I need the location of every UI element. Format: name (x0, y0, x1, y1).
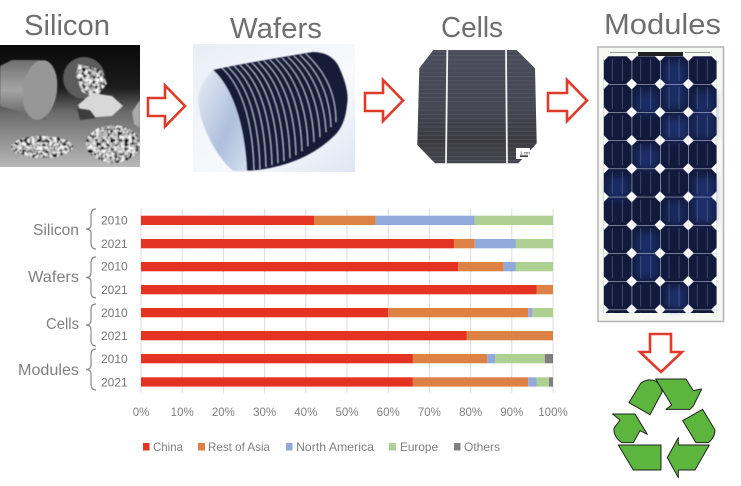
x axis labels: 60% (377, 407, 400, 419)
arrow: silicon to wafers (148, 86, 185, 126)
icon: recycling symbol (613, 379, 715, 478)
x axis labels: 10% (171, 407, 194, 419)
bars: Silicon 2021 (141, 239, 553, 248)
x axis labels: 0% (133, 407, 149, 419)
bar chart: production share by region (18, 209, 568, 419)
legend: Rest of Asia (208, 440, 270, 454)
photo: solar module (598, 47, 724, 322)
bars: Silicon 2010 (141, 216, 553, 225)
bars: Modules 2010 (141, 354, 553, 363)
title: Cells: Cells (441, 12, 503, 44)
year labels: 2010 (101, 306, 128, 320)
bars: Cells 2021 (141, 331, 553, 340)
arrow: cells to modules (548, 80, 587, 121)
photo: solar cell (417, 50, 537, 163)
x axis labels: 30% (253, 407, 276, 419)
x axis labels: 20% (212, 407, 235, 419)
brace: Wafers (86, 257, 96, 298)
bars: Modules 2021 (141, 377, 553, 387)
photo: stack of wafers (193, 44, 355, 172)
year labels: 2010 (101, 260, 128, 274)
arrow: wafers to cells (365, 80, 403, 121)
category label: Cells: Cells (46, 316, 79, 333)
brace: Silicon (86, 209, 96, 249)
category label: Modules: Modules (18, 362, 79, 379)
bars: Wafers 2021 (141, 285, 553, 294)
year labels: 2010 (101, 214, 128, 228)
title: Silicon: Silicon (24, 10, 110, 42)
category label: Silicon: Silicon (33, 222, 79, 239)
legend: China (153, 440, 183, 454)
year labels: 2021 (101, 329, 128, 343)
category label: Wafers: Wafers (28, 269, 79, 286)
scale bar: 1 cm (520, 150, 530, 156)
x axis labels: 50% (335, 407, 359, 419)
year labels: 2021 (101, 376, 128, 390)
bars: Wafers 2010 (141, 262, 553, 271)
bars: Cells 2010 (141, 308, 553, 317)
legend (143, 440, 500, 454)
x axis labels (133, 407, 568, 419)
x axis labels: 70% (418, 407, 441, 419)
year labels: 2010 (101, 352, 128, 366)
arrow: modules to recycling (640, 334, 682, 372)
x axis labels: 40% (294, 407, 317, 419)
title: Wafers: Wafers (230, 13, 322, 45)
x axis labels: 80% (459, 407, 482, 419)
brace: Modules (86, 349, 96, 390)
year labels (101, 214, 128, 390)
legend: Others (464, 440, 500, 454)
brace: Cells (86, 304, 96, 346)
photo: silicon ingot and chunks (0, 45, 140, 167)
title: Modules: Modules (604, 9, 721, 41)
year labels: 2021 (101, 237, 128, 251)
x axis labels: 90% (500, 407, 523, 419)
x axis labels: 100% (538, 407, 568, 419)
year labels: 2021 (101, 283, 128, 297)
legend: North America (296, 440, 374, 454)
legend: Europe (400, 440, 438, 454)
